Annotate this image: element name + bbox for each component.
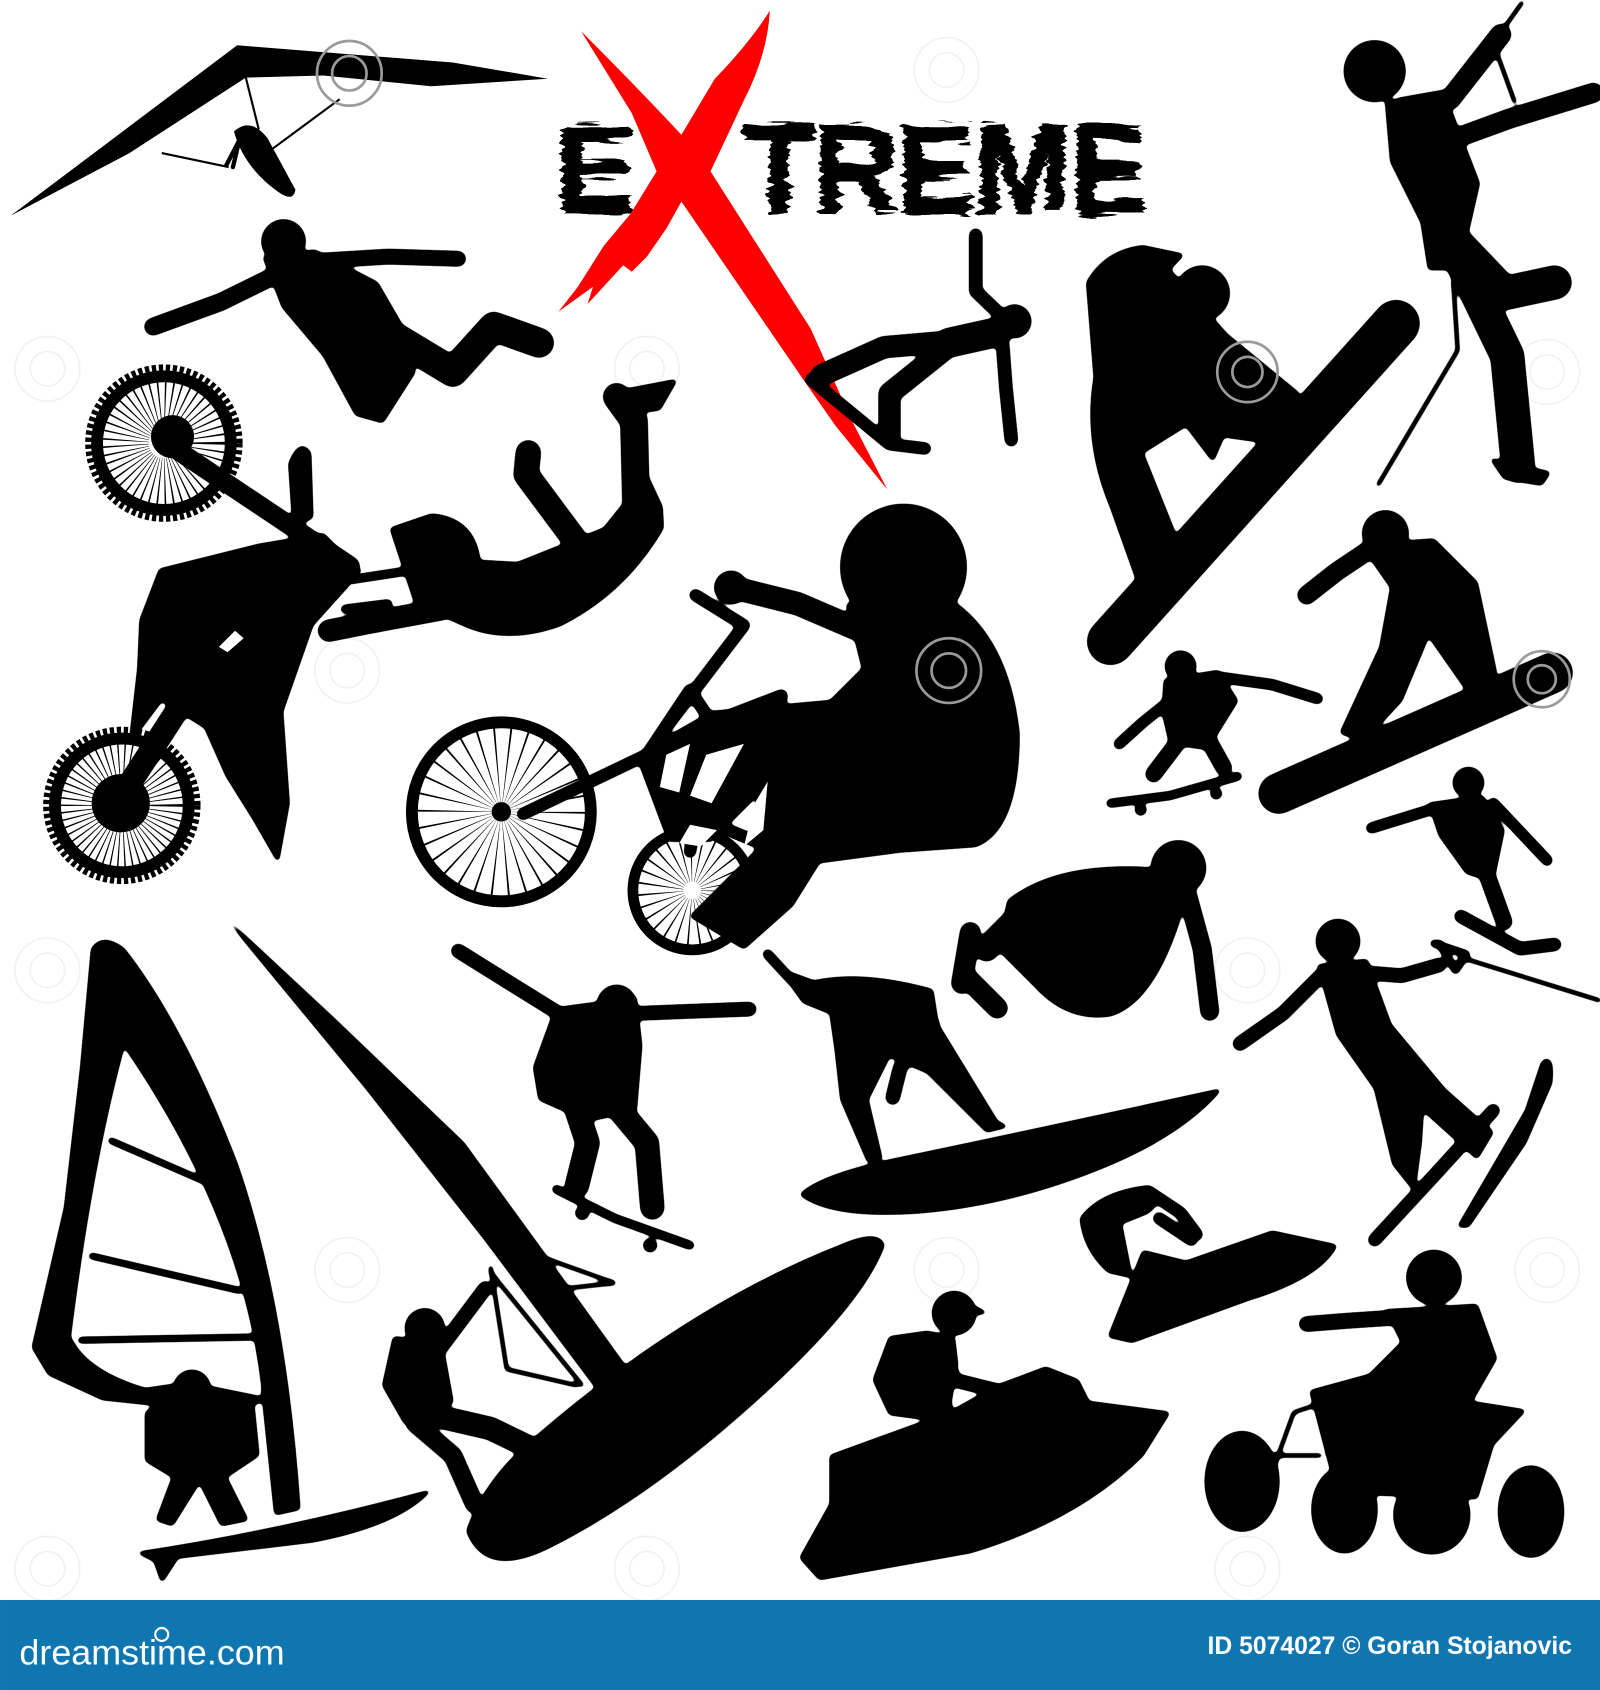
figure: skydiver [153, 220, 539, 423]
icon: watermark spirals on silhouettes [317, 41, 1570, 707]
icon: footer spiral logo [155, 1628, 168, 1641]
figure: surfer on long board [768, 954, 1222, 1214]
figure: aerial skater [811, 235, 1031, 449]
figure: windsurfer left [32, 941, 431, 1583]
icon: BMX front wheel [412, 722, 591, 901]
figure: motocross rider with bike [46, 368, 677, 881]
figure: BMX rider [412, 505, 1019, 950]
figure: quad bike rider [1205, 1251, 1563, 1557]
figure: rollerblader inverted [962, 841, 1210, 1017]
figure: jet ski small rider [1080, 1186, 1337, 1342]
icon: red brushed X [558, 11, 887, 489]
figure: flying motocross rider [329, 380, 677, 635]
icon: bottom dirt bike wheel [46, 730, 197, 881]
figure: climber on rope [1344, 2, 1594, 485]
icon: top dirt bike wheel [88, 368, 239, 519]
figure: water skier [1240, 920, 1600, 1240]
icon: BMX rear wheel [633, 831, 751, 950]
figure: small snowboarder right [1371, 768, 1555, 949]
footer credit: ID 5074027 © Goran Stojanovic [1208, 1633, 1572, 1660]
footer logo: dreamstime.com: dreamstime.com [19, 1633, 285, 1673]
figure: windsurfer jumping [224, 916, 884, 1560]
figure: jet ski rider [800, 1292, 1170, 1579]
figure: street skateboarder [458, 951, 749, 1252]
icon: hang glider [11, 45, 548, 216]
figure: small skateboarder [1111, 651, 1318, 815]
title: EXTREME [555, 11, 1147, 489]
footer band [0, 1600, 1600, 1690]
figure: snowboarder on right [1279, 511, 1553, 794]
figure: big snowboarder [1087, 246, 1396, 641]
title: EXTREME: E [555, 99, 636, 239]
title: EXTREME: TREME [744, 99, 1147, 239]
